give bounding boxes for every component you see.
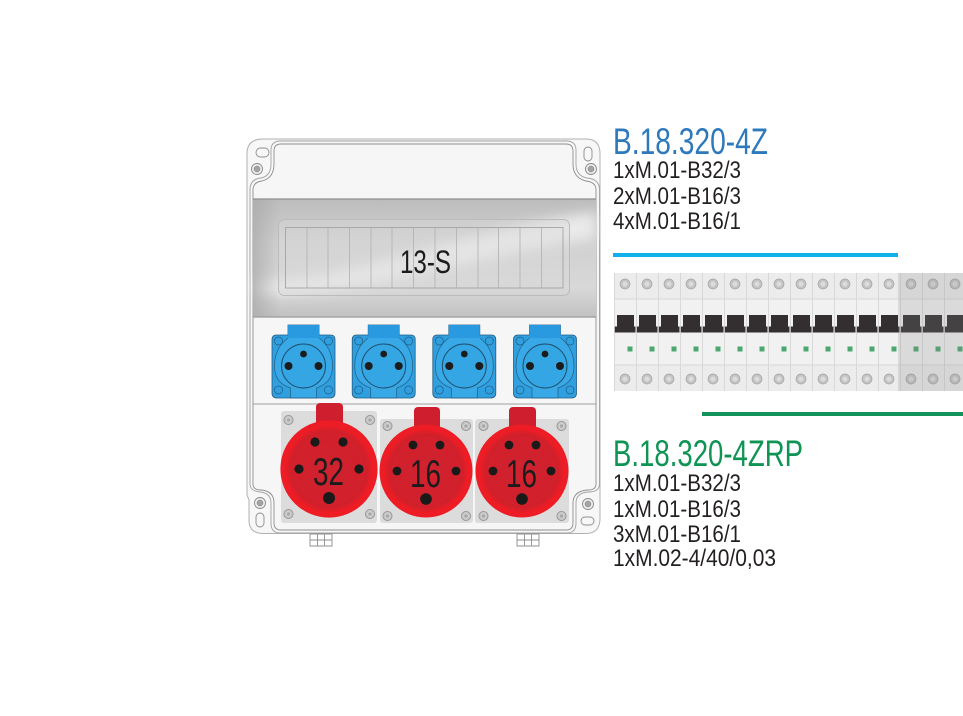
lid outer line bbox=[250, 141, 600, 533]
parts list: 4Z: 2xM.01-B16/3 bbox=[613, 183, 741, 210]
lid inner line bbox=[253, 144, 596, 530]
parts list: 4ZRP: 1xM.02-4/40/0,03 bbox=[613, 545, 776, 572]
red socket 32A bbox=[280, 403, 378, 523]
heading: B.18.320-4Z: B.18.320-4Z bbox=[613, 121, 768, 162]
parts list: 4ZRP: 1xM.01-B32/3 bbox=[613, 470, 741, 497]
enclosure outer shell bbox=[247, 139, 600, 534]
shaded extra modules bbox=[898, 273, 963, 391]
red socket 16A left bbox=[380, 407, 473, 523]
parts list: 4Z: 1xM.01-B32/3 bbox=[613, 157, 741, 184]
parts list: 4ZRP bbox=[613, 470, 776, 572]
hinges bbox=[310, 534, 539, 546]
red socket 32A: 32 bbox=[313, 451, 344, 494]
breaker strip bbox=[614, 273, 963, 391]
blue socket 4 bbox=[514, 325, 576, 398]
blue rule bbox=[613, 253, 898, 257]
blue socket 1 bbox=[272, 325, 335, 398]
red socket 16A right: 16 bbox=[506, 453, 537, 496]
parts list: 4Z: 4xM.01-B16/1 bbox=[613, 208, 741, 235]
heading: B.18.320-4ZRP: B.18.320-4ZRP bbox=[613, 433, 803, 474]
grey breaker cover band bbox=[253, 199, 596, 317]
blue socket 3 bbox=[433, 325, 496, 398]
corner screws bbox=[252, 164, 596, 510]
divider between blue and red rows bbox=[253, 403, 596, 405]
parts list: 4ZRP: 3xM.01-B16/1 bbox=[613, 521, 741, 548]
red socket 16A right bbox=[475, 407, 569, 523]
parts list: 4Z bbox=[613, 157, 741, 235]
breaker window bbox=[278, 220, 570, 296]
enclosure bbox=[247, 139, 600, 546]
red socket 16A left: 16 bbox=[410, 453, 441, 496]
blue socket 2 bbox=[352, 325, 415, 398]
label: 13-S: 13-S bbox=[400, 244, 451, 280]
corner ovals bbox=[256, 147, 594, 527]
parts list: 4ZRP: 1xM.01-B16/3 bbox=[613, 496, 741, 523]
green rule bbox=[702, 412, 963, 416]
